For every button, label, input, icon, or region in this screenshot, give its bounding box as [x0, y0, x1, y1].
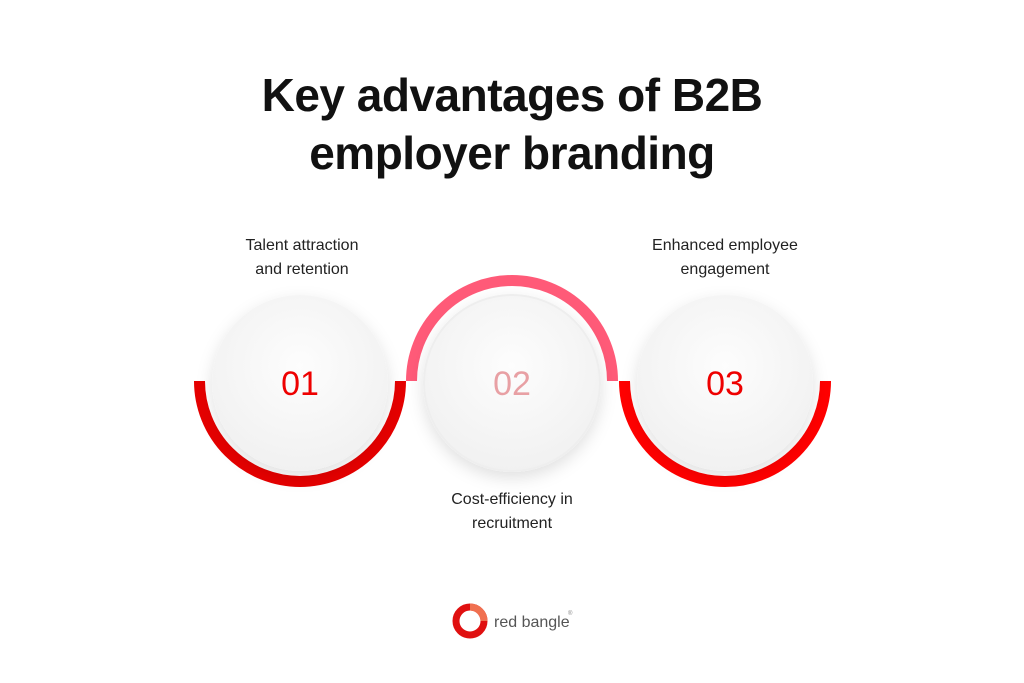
label: cost: recruitment — [472, 515, 552, 532]
label: cost: Cost-efficiency in — [451, 491, 573, 508]
logo: ® — [568, 610, 573, 617]
label: engagement: engagement — [681, 261, 769, 278]
label: engagement — [652, 237, 798, 278]
arc 1 — [200, 381, 400, 481]
label: talent — [246, 237, 358, 278]
circle 03: 03 — [706, 365, 744, 403]
circle 01 — [212, 295, 388, 471]
title — [262, 69, 762, 179]
title: Key advantages of B2B — [262, 69, 762, 121]
arc 2 — [412, 280, 612, 381]
logo — [456, 607, 573, 635]
logo: red bangle — [494, 614, 570, 631]
label: talent: Talent attraction — [246, 237, 358, 254]
label: engagement: Enhanced employee — [652, 237, 798, 254]
label: cost — [451, 491, 573, 532]
circle 01: 01 — [281, 365, 319, 403]
circle 02 — [424, 295, 600, 471]
label: talent: and retention — [255, 261, 349, 278]
circle 02: 02 — [493, 365, 531, 403]
title: employer branding — [309, 127, 715, 179]
circle 03 — [637, 295, 813, 471]
arc 3 — [624, 381, 826, 482]
